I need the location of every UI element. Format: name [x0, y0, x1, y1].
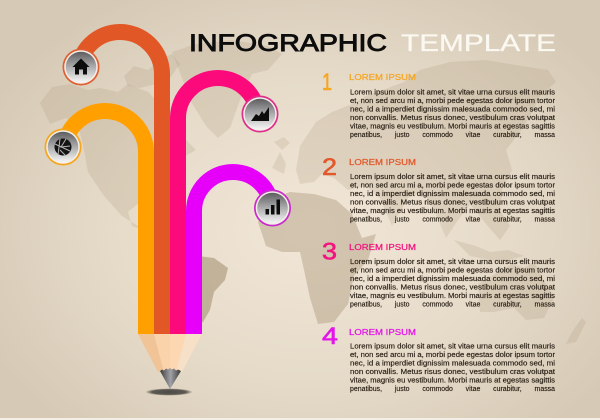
stem: magenta [194, 172, 272, 334]
map: africa [258, 192, 376, 324]
icon: area chart [242, 96, 278, 132]
map: greenland [172, 40, 282, 138]
body text 4: nec, id a imperdiet dignissim malesuada commodo sed, mi [350, 360, 555, 368]
body text 4: penatibus, justo commodo vitae curabitur, massa [350, 386, 555, 393]
body text 4: vitae, magnis eu vestibulum. Morbi mauris at egestas sagittis [350, 378, 556, 384]
pencil lead [160, 368, 181, 389]
map: australia [478, 262, 554, 320]
icon: bar chart [254, 190, 291, 226]
body text 2: Lorem ipsum dolor sit amet, sit vitae urna cursus elit mauris [350, 174, 556, 181]
body text 1: vitae, magnis eu vestibulum. Morbi mauris at egestas sagittis [350, 124, 556, 130]
body text 2: et, non sed arcu mi a, morbi pede egestas dolor ipsum tortor [350, 182, 556, 190]
icon: home [62, 48, 100, 86]
title: TEMPLATE [401, 30, 556, 57]
body text 3: Lorem ipsum dolor sit amet, sit vitae urna cursus elit mauris [350, 259, 556, 266]
map: north america [40, 84, 196, 246]
heading 2: LOREM IPSUM [349, 157, 416, 167]
pencil illustration [64, 32, 272, 396]
map: arctic islands [124, 54, 180, 88]
body text 3: vitae, magnis eu vestibulum. Morbi mauris at egestas sagittis [350, 293, 556, 300]
body text 1: non convallis. Metus risus donec, vestibulum cras volutpat [350, 115, 555, 122]
body text 4: non convallis. Metus risus donec, vestibulum cras volutpat [350, 369, 555, 376]
body text 1: penatibus, justo commodo vitae curabitur, massa [350, 132, 555, 139]
world map [40, 40, 586, 344]
heading 1: LOREM IPSUM [349, 72, 416, 82]
body text 3: et, non sed arcu mi a, morbi pede egestas dolor ipsum tortor [350, 268, 556, 274]
body text 4: et, non sed arcu mi a, morbi pede egestas dolor ipsum tortor [350, 352, 556, 359]
pencil shadow [146, 388, 192, 396]
stem: orange [64, 111, 146, 334]
body text 1: et, non sed arcu mi a, morbi pede egestas dolor ipsum tortor [350, 98, 556, 105]
pencil wood tip [138, 334, 202, 372]
panel: item 2 [322, 154, 556, 224]
body text 1 [350, 90, 556, 139]
bottom edge [0, 418, 600, 420]
stem: red [78, 32, 162, 334]
stem: pink [178, 78, 258, 334]
heading 4: LOREM IPSUM [349, 327, 416, 337]
title [189, 30, 556, 57]
map: south america [168, 246, 228, 330]
body text 2 [350, 174, 556, 224]
number 4: 4 [322, 323, 338, 350]
body text 4 [350, 344, 556, 393]
body text 2: penatibus, justo commodo vitae curabitur, massa [350, 216, 555, 224]
panel: item 3 [322, 238, 556, 308]
map: indonesia [454, 240, 524, 262]
body text 2: non convallis. Metus risus donec, vestibulum cras volutpat [350, 200, 555, 206]
body text 3: penatibus, justo commodo vitae curabitur, massa [350, 302, 555, 308]
number 2: 2 [322, 154, 337, 181]
map: new zealand [566, 318, 586, 344]
icon: globe [44, 128, 82, 166]
body text 1: Lorem ipsum dolor sit amet, sit vitae urna cursus elit mauris [350, 90, 556, 96]
heading 3: LOREM IPSUM [349, 242, 416, 252]
body text 2: nec, id a imperdiet dignissim malesuada commodo sed, mi [350, 191, 555, 198]
panel: item 1 [322, 69, 556, 139]
map: iceland and uk [272, 137, 290, 174]
body text 3 [350, 259, 556, 308]
title: INFOGRAPHIC [189, 30, 387, 57]
map: eurasia [296, 60, 556, 240]
body text 3: non convallis. Metus risus donec, vestibulum cras volutpat [350, 284, 555, 292]
number 1: 1 [322, 69, 332, 96]
panel: item 4 [322, 323, 556, 393]
body text 2: vitae, magnis eu vestibulum. Morbi mauris at egestas sagittis [350, 208, 556, 215]
number 3: 3 [322, 238, 337, 266]
body text 1: nec, id a imperdiet dignissim malesuada commodo sed, mi [350, 106, 555, 114]
body text 4: Lorem ipsum dolor sit amet, sit vitae urna cursus elit mauris [350, 344, 556, 350]
body text 3: nec, id a imperdiet dignissim malesuada commodo sed, mi [350, 276, 555, 283]
